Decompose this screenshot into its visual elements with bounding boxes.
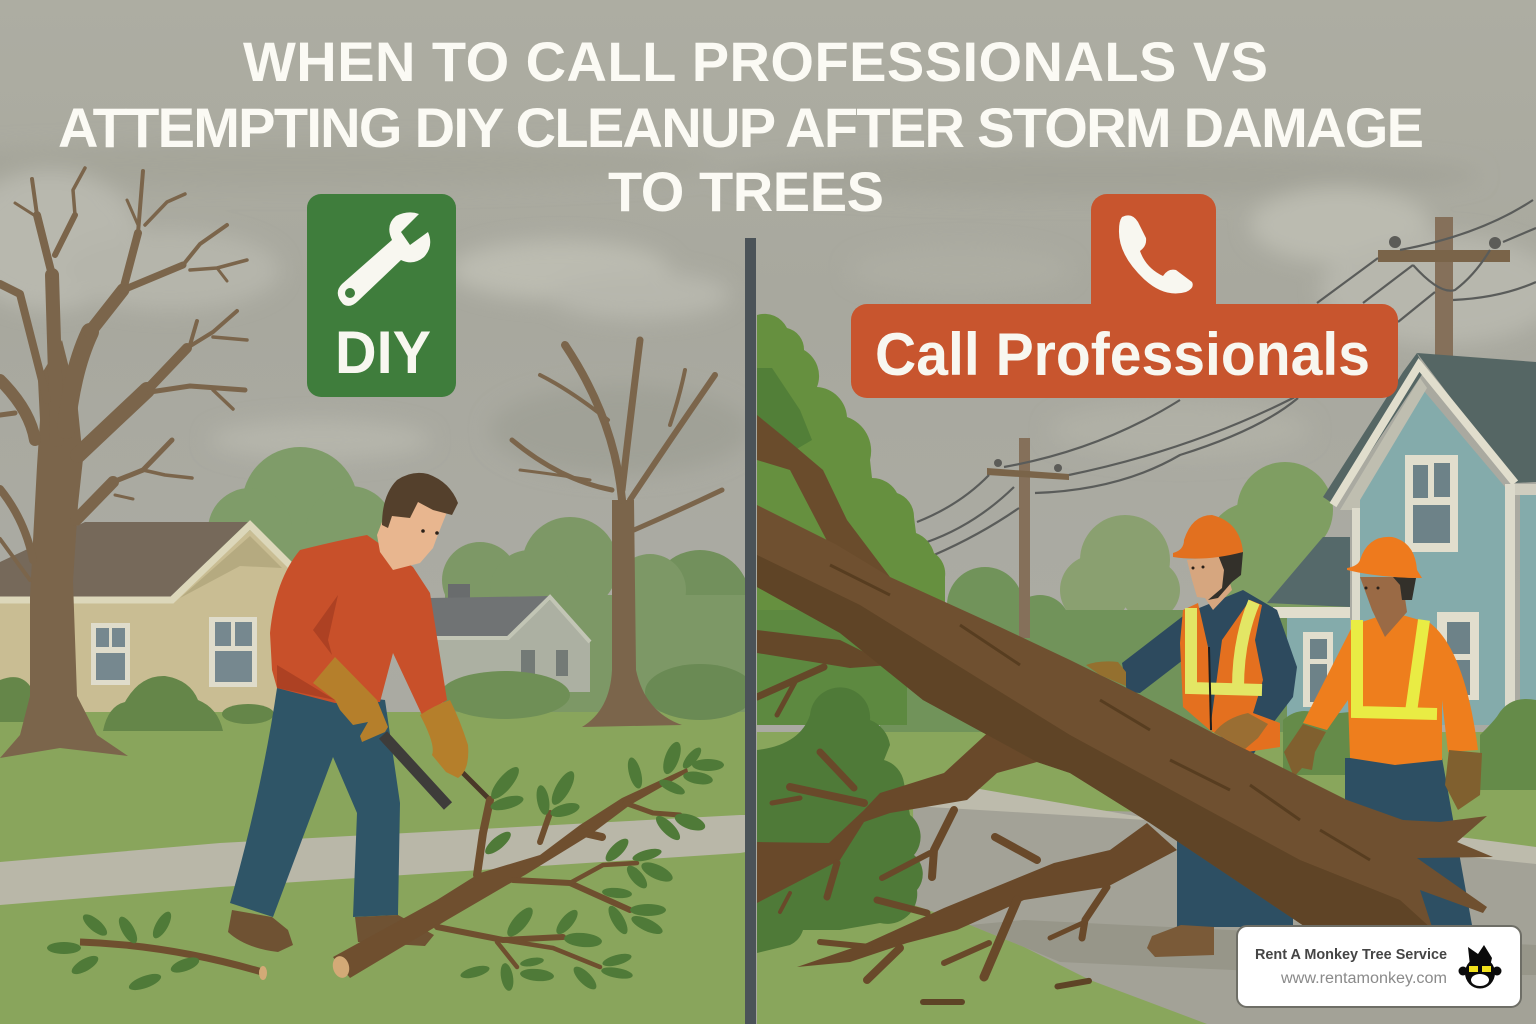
road: [913, 806, 1536, 1024]
left limb: [757, 630, 890, 668]
vest stripes: [1191, 602, 1262, 690]
power lines: [917, 200, 1536, 555]
fallen twig: [47, 909, 267, 993]
jacket stripes: [1357, 620, 1437, 714]
Call Professionals badge: [851, 194, 1398, 398]
center divider: [745, 238, 756, 1024]
worker 2: [1284, 537, 1482, 925]
eyes: [421, 529, 439, 535]
hard hat: [1173, 515, 1243, 559]
hair: [382, 473, 458, 528]
hedges right: [1283, 699, 1536, 790]
trousers: [1345, 758, 1472, 925]
road debris: [920, 977, 1092, 1005]
hair: [1208, 552, 1243, 600]
title: WHEN TO CALL PROFESSIONALS VS: [243, 30, 1268, 93]
main trunk: [757, 505, 1493, 930]
bare tree left: [0, 168, 247, 758]
lawn: [757, 732, 1536, 1024]
utility pole near: [1378, 217, 1510, 357]
sidewalk: [0, 815, 746, 905]
glove left: [1284, 724, 1326, 777]
eyes: [1364, 586, 1380, 590]
left house: [0, 522, 297, 716]
bare tree right: [512, 340, 722, 727]
lawn: [0, 712, 746, 1024]
background trees left: [208, 447, 750, 715]
bushes: [0, 664, 755, 731]
lower branch B: [797, 823, 1177, 967]
arm and torso: [1122, 590, 1297, 760]
trunk shadow: [757, 555, 1433, 930]
utility pole far: [987, 438, 1069, 638]
company badge: [1237, 926, 1521, 1007]
glove right: [1445, 750, 1482, 810]
neck and face: [377, 497, 447, 570]
jacket: [1303, 612, 1478, 765]
panel: DIY scene: [0, 168, 755, 1024]
glove right on trunk: [1214, 713, 1268, 749]
icon: wrench: [338, 212, 430, 306]
company url: www.rentamonkey.com: [1280, 970, 1447, 987]
sidewalk: [913, 788, 1536, 864]
face: [1187, 556, 1232, 610]
eyes: [1192, 566, 1204, 570]
upper limb: [757, 415, 890, 577]
cut branch with leaves: [330, 740, 724, 993]
gray house: [430, 584, 590, 692]
bark marks: [830, 565, 1370, 860]
panel: Call Professionals scene: [757, 200, 1536, 1024]
left glove: [313, 657, 388, 742]
trousers: [1177, 840, 1293, 927]
face: [1360, 577, 1407, 637]
hair: [1393, 577, 1416, 600]
icon: phone: [1119, 215, 1193, 294]
zipper: [1209, 647, 1211, 730]
shirt shadow: [277, 595, 338, 700]
boot left: [228, 910, 293, 952]
lopper handle: [458, 768, 490, 800]
fallen tree trunk with branches: [757, 415, 1493, 1005]
Call Professionals label: Call Professionals: [875, 321, 1370, 388]
figure: man with lopper: [228, 473, 490, 952]
limb twigs: [757, 667, 824, 715]
title: ATTEMPTING DIY CLEANUP AFTER STORM DAMAGE: [58, 96, 1424, 159]
worker 1: [1122, 515, 1297, 957]
shirt: [270, 535, 447, 715]
hard hat: [1347, 537, 1422, 578]
boot right: [355, 915, 434, 946]
glove on trunk: [1086, 661, 1126, 686]
icon: monkey logo: [1458, 945, 1502, 988]
title: [58, 30, 1424, 223]
lower branch A: [757, 734, 1037, 903]
company name: Rent A Monkey Tree Service: [1255, 947, 1447, 963]
vest: [1180, 600, 1280, 752]
road shadow: [970, 920, 1536, 975]
boot: [1147, 925, 1214, 957]
right glove: [420, 700, 468, 778]
DIY label: DIY: [335, 319, 431, 386]
DIY badge: [307, 194, 456, 397]
title: TO TREES: [608, 160, 884, 223]
lopper blade: [383, 735, 448, 806]
large green foliage: [757, 314, 945, 953]
blue house: [1267, 353, 1536, 725]
trousers: [230, 688, 400, 917]
background trees right: [880, 462, 1350, 735]
